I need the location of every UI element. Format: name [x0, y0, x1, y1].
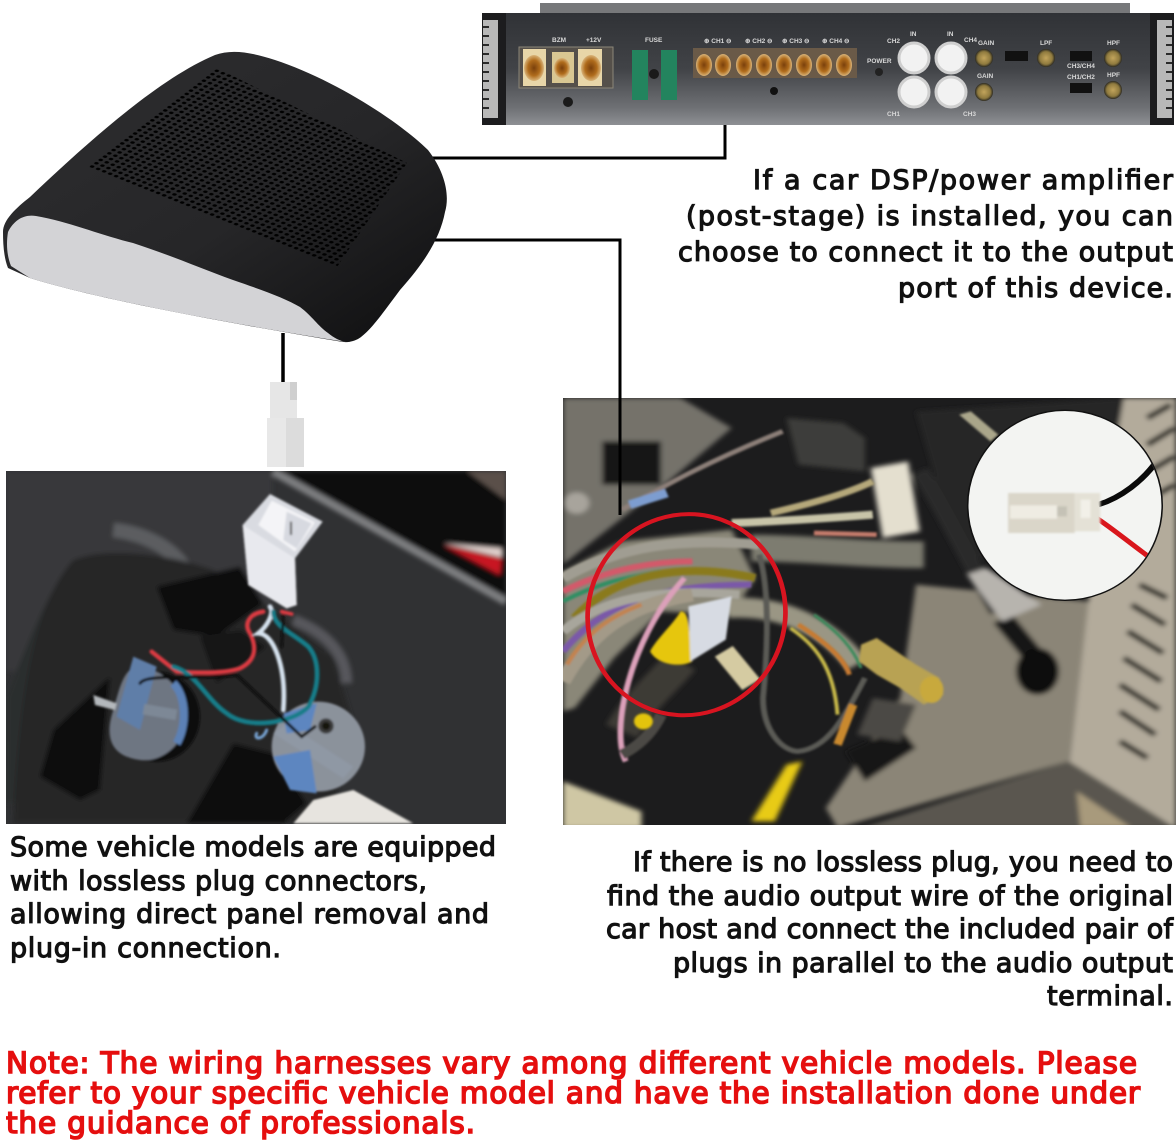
amplifier photo: ⊕ CH2 ⊖: [745, 38, 773, 45]
amplifier photo: CH3: [963, 111, 976, 118]
text: no lossless plug note: terminal.: [1047, 981, 1173, 1012]
amplifier photo: CH4: [964, 37, 977, 44]
callout line end over photo: [618, 398, 622, 515]
text: no lossless plug note: plugs in parallel to the audio output: [673, 948, 1173, 979]
amplifier photo: POWER: [867, 58, 892, 65]
red warning note: the guidance of professionals.: [6, 1106, 475, 1140]
text: DSP amplifier note: (post-stage) is installed, you can: [686, 201, 1173, 232]
amplifier photo: ⊕ CH4 ⊖: [822, 38, 850, 45]
red warning note: Note: The wiring harnesses vary among different vehicle models. Please: [6, 1046, 1137, 1080]
amplifier photo: CH1: [887, 111, 900, 118]
connector line to wiring photo: [433, 240, 620, 398]
amplifier photo: [482, 3, 1174, 125]
amplifier photo: BZM: [552, 37, 566, 44]
amplifier photo: CH1/CH2: [1067, 74, 1095, 81]
text: lossless plug note: with lossless plug connectors,: [10, 866, 427, 897]
text: DSP amplifier note: port of this device.: [898, 273, 1173, 304]
text: no lossless plug note: car host and connect the included pair of: [606, 914, 1174, 945]
white plug connector: [267, 382, 304, 467]
text: no lossless plug note: If there is no lossless plug, you need to: [633, 847, 1173, 878]
amplifier photo: LPF: [1040, 40, 1052, 47]
audio processor device: [3, 52, 447, 342]
amplifier photo: GAIN: [978, 40, 995, 47]
amplifier photo: ⊕ CH1 ⊖: [704, 38, 732, 45]
text: DSP amplifier note: choose to connect it to the output: [678, 237, 1173, 268]
amplifier photo: FUSE: [645, 37, 663, 44]
connector line to plug: [281, 333, 285, 382]
red warning note: refer to your specific vehicle model and have the installation done under: [6, 1076, 1141, 1110]
text: lossless plug note: plug-in connection.: [10, 933, 281, 964]
inset plug close-up: [968, 410, 1162, 600]
text: lossless plug note: Some vehicle models are equipped: [10, 832, 496, 863]
text: DSP amplifier note: [678, 165, 1174, 304]
red warning note: [6, 1046, 1141, 1140]
amplifier photo: IN: [947, 31, 954, 38]
text: no lossless plug note: [606, 847, 1174, 1012]
amplifier photo: ⊕ CH3 ⊖: [782, 38, 810, 45]
connector line to amplifier: [430, 125, 725, 158]
red highlight circle: [580, 508, 793, 721]
amplifier photo: CH2: [887, 38, 900, 45]
text: lossless plug note: allowing direct panel removal and: [10, 899, 489, 930]
text: lossless plug note: [10, 832, 496, 964]
amplifier photo: HPF: [1107, 72, 1120, 79]
photo: lossless plug connector: [6, 471, 506, 824]
text: no lossless plug note: find the audio output wire of the original: [607, 881, 1173, 912]
amplifier photo: GAIN: [977, 73, 994, 80]
amplifier photo: IN: [910, 31, 917, 38]
amplifier photo: HPF: [1107, 40, 1120, 47]
amplifier photo: CH3/CH4: [1067, 63, 1095, 70]
amplifier photo: +12V: [586, 37, 602, 44]
photo: car audio wiring: [563, 398, 1176, 828]
text: DSP amplifier note: If a car DSP/power amplifier: [753, 165, 1174, 196]
